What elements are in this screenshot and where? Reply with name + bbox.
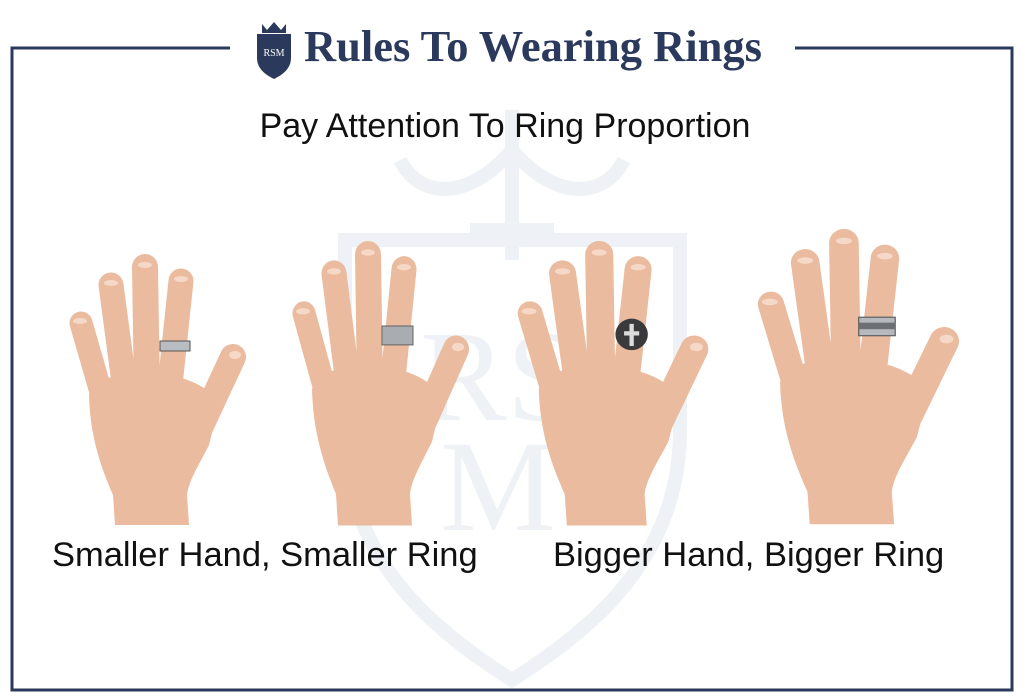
hand 4 bbox=[762, 238, 953, 524]
label right: Bigger Hand, Bigger Ring bbox=[553, 536, 944, 574]
hand 2 bbox=[296, 249, 464, 526]
title: Rules To Wearing Rings bbox=[304, 21, 762, 71]
subtitle: Pay Attention To Ring Proportion bbox=[260, 107, 750, 145]
watermark shield: M bbox=[440, 415, 556, 559]
logo bbox=[257, 22, 291, 79]
logo: RSM bbox=[263, 48, 285, 59]
label left: Smaller Hand, Smaller Ring bbox=[52, 536, 478, 574]
hand 1 bbox=[73, 262, 241, 525]
hand 3 bbox=[521, 249, 703, 526]
watermark shield: RS bbox=[420, 305, 579, 449]
